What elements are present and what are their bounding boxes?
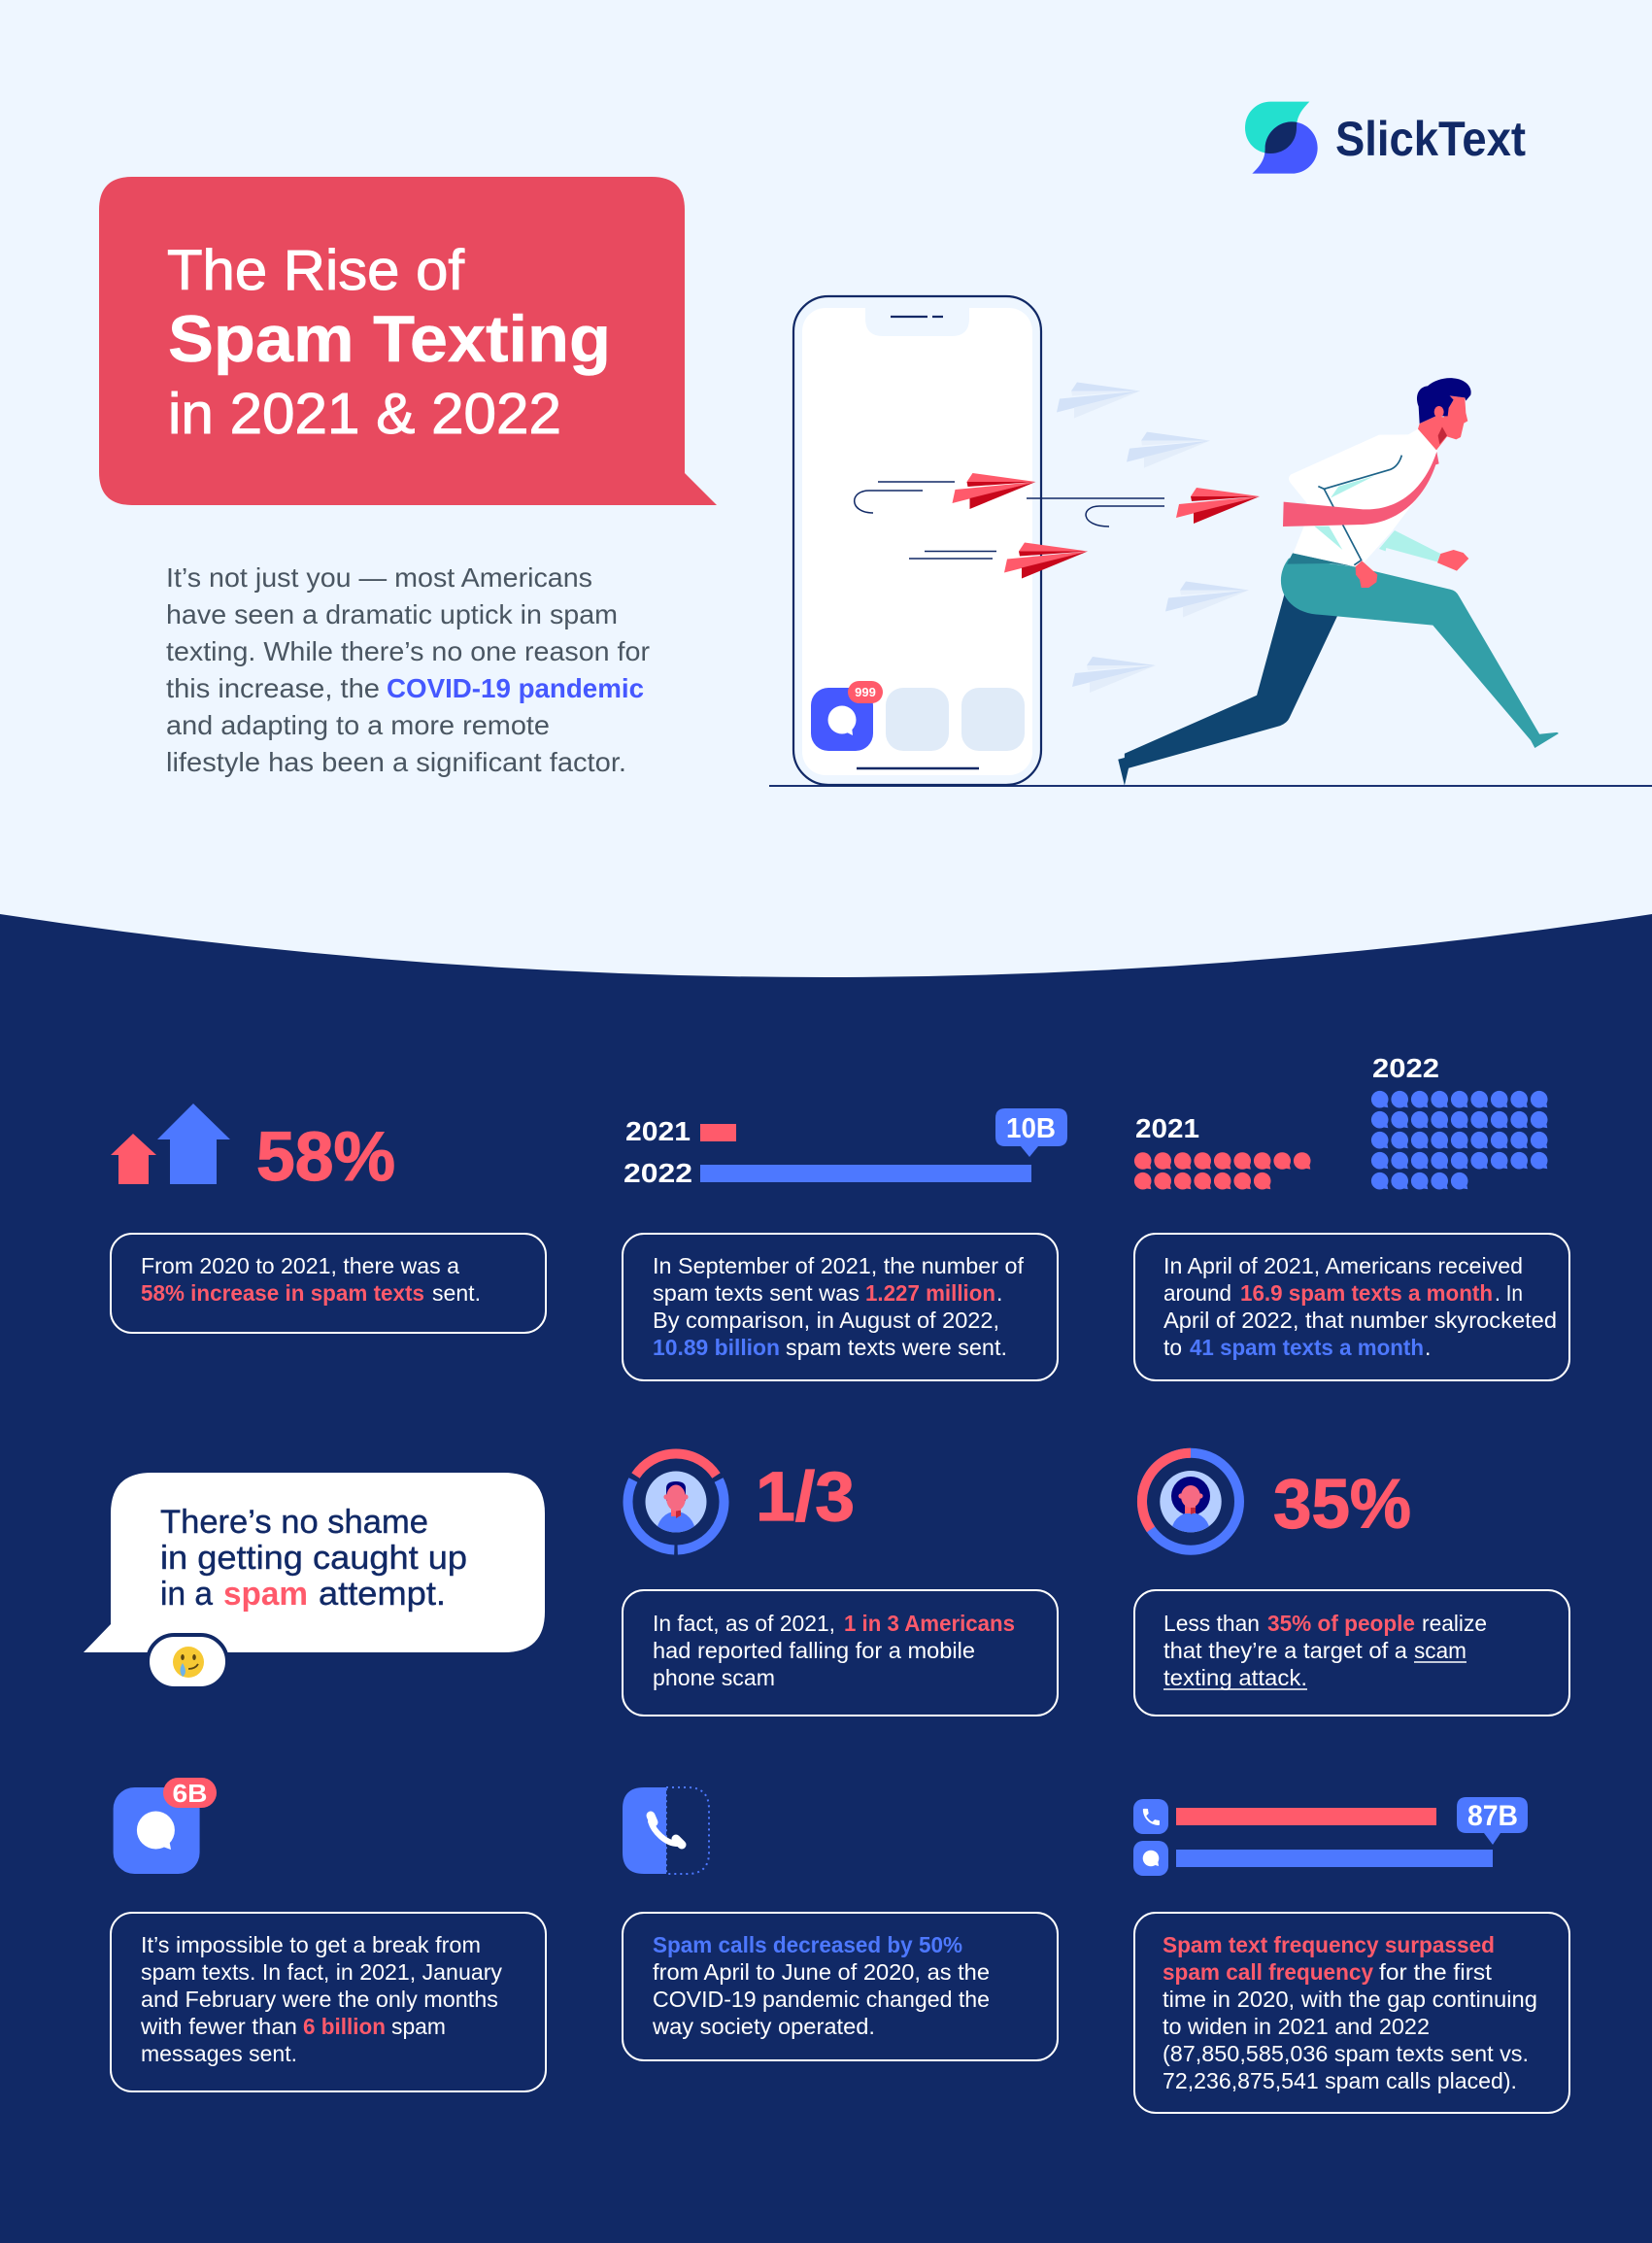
- app icon: messages: [811, 681, 883, 751]
- icon: message app with badge: 6B: [173, 1779, 208, 1808]
- intro paragraph: have seen a dramatic uptick in spam: [166, 599, 618, 629]
- bubble shape: [99, 177, 717, 505]
- bubble shape: [84, 1473, 545, 1652]
- callout box: (87,850,585,036 spam texts sent vs.: [1163, 2041, 1529, 2066]
- callout box: spam texts. In fact, in 2021, January: [141, 1959, 502, 1985]
- callout box: In fact, as of 2021,: [653, 1611, 835, 1636]
- callout box: way society operated.: [652, 2014, 875, 2039]
- intro paragraph: texting. While there’s no one reason for: [166, 636, 650, 666]
- stat 6: 6 billion: [111, 1778, 546, 2091]
- big number: 35%: [1273, 1467, 1411, 1544]
- callout box: sent.: [432, 1280, 481, 1306]
- man: legs: [1118, 559, 1559, 786]
- callout box: From 2020 to 2021, there was a: [141, 1253, 459, 1278]
- stat 3: spam texts per month pictogram: [1134, 1053, 1569, 1380]
- callout box: spam: [391, 2014, 446, 2039]
- callout box: for the first: [1379, 1959, 1493, 1985]
- callout box: 1 in 3 Americans: [844, 1611, 1015, 1636]
- callout box: 72,236,875,541 spam calls placed).: [1163, 2068, 1517, 2093]
- quote text: attempt.: [319, 1576, 446, 1613]
- callout box: texting attack.: [1163, 1665, 1307, 1690]
- big number: 1/3: [756, 1459, 855, 1536]
- illustration: running man: [1118, 378, 1559, 786]
- app icons: blank: [886, 688, 1025, 751]
- callout box: with fewer than: [140, 2014, 297, 2039]
- callout box: 58% increase in spam texts: [141, 1280, 424, 1306]
- callout box: [111, 1913, 546, 2091]
- callout box: Spam calls decreased by 50%: [653, 1932, 962, 1957]
- logo: SlickText: [1245, 102, 1526, 174]
- callout box: [1134, 1234, 1569, 1380]
- title text: in 2021 & 2022: [168, 382, 561, 446]
- stat 5: 35% of people: [1134, 1453, 1569, 1716]
- callout box: 1.227 million: [865, 1280, 995, 1306]
- intro paragraph: lifestyle has been a significant factor.: [166, 747, 626, 777]
- callout box: 6 billion: [303, 2014, 386, 2039]
- intro paragraph: and adapting to a more remote: [166, 710, 550, 740]
- icon: half phone app: [623, 1787, 709, 1874]
- bar chart: [624, 1108, 1067, 1188]
- stat 4: 1 in 3 Americans: [623, 1453, 1058, 1716]
- title bubble: [99, 177, 717, 505]
- bar chart: [1133, 1797, 1528, 1876]
- title text: The Rise of: [167, 239, 465, 302]
- icon: message app with badge: [114, 1778, 217, 1874]
- bar chart: 2021: [625, 1116, 691, 1146]
- intro paragraph: It’s not just you — most Americans: [166, 562, 592, 593]
- intro paragraph: COVID-19 pandemic: [387, 673, 644, 703]
- title text: [167, 239, 611, 446]
- badge: 87B: [1457, 1797, 1528, 1845]
- callout box: .: [996, 1280, 1002, 1306]
- callout box: COVID-19 pandemic changed the: [653, 1987, 990, 2012]
- pictogram 2021: [1134, 1113, 1310, 1189]
- illustration: phone: [793, 296, 1041, 785]
- icon: donut with avatar: [1142, 1453, 1239, 1553]
- callout box: In April of 2021, Americans received: [1163, 1253, 1523, 1278]
- callout box: time in 2020, with the gap continuing: [1163, 1987, 1537, 2012]
- badge: 87B: 87B: [1467, 1800, 1518, 1832]
- emoji pill: [148, 1635, 227, 1688]
- big number: 58%: [256, 1119, 395, 1196]
- callout box: [1134, 1590, 1569, 1716]
- callout box: .: [1425, 1335, 1431, 1360]
- pictogram 2022: [1371, 1053, 1547, 1189]
- illustration: ghost paper planes: [1057, 383, 1249, 693]
- callout box: that they’re a target of a: [1163, 1638, 1407, 1663]
- callout box: 16.9 spam texts a month: [1240, 1280, 1493, 1306]
- callout box: spam call frequency: [1163, 1959, 1373, 1985]
- callout box: By comparison, in August of 2022,: [653, 1308, 999, 1333]
- callout box: around: [1163, 1280, 1231, 1306]
- callout box: Less than: [1163, 1611, 1260, 1636]
- callout box: to widen in 2021 and 2022: [1163, 2014, 1430, 2039]
- callout box: It’s impossible to get a break from: [141, 1932, 481, 1957]
- callout box: 10.89 billion: [653, 1335, 780, 1360]
- app icon: messages: 999: [855, 685, 876, 699]
- badge: 10B: 10B: [1006, 1113, 1056, 1144]
- callout box: and February were the only months: [141, 1987, 498, 2012]
- quote text: spam: [223, 1576, 308, 1613]
- quote speech bubble: [84, 1473, 545, 1688]
- callout box: [111, 1234, 546, 1333]
- illustration: red paper planes with speed lines: [855, 473, 1260, 579]
- stat 7: spam calls decreased: [623, 1787, 1058, 2060]
- callout box: messages sent.: [141, 2041, 297, 2066]
- callout box: [1134, 1913, 1569, 2113]
- stat 2: bar comparison 2021 vs 2022: [623, 1108, 1067, 1380]
- logo wordmark: SlickText: [1335, 112, 1526, 166]
- quote text: [160, 1504, 467, 1613]
- callout box: Spam text frequency surpassed: [1163, 1932, 1495, 1957]
- bar chart: 2022: [624, 1158, 692, 1188]
- callout box: . In: [1495, 1280, 1523, 1306]
- intro paragraph: [166, 562, 650, 777]
- callout box: phone scam: [653, 1665, 775, 1690]
- quote text: in a: [160, 1576, 214, 1613]
- stat 1: 58% increase: [111, 1104, 546, 1333]
- callout box: from April to June of 2020, as the: [653, 1959, 990, 1985]
- callout box: [623, 1590, 1058, 1716]
- logo mark: [1245, 102, 1318, 174]
- callout box: April of 2022, that number skyrocketed: [1163, 1308, 1557, 1333]
- icon: ring with avatar: [627, 1453, 725, 1554]
- callout box: to: [1163, 1335, 1182, 1360]
- callout box: spam texts sent was: [653, 1280, 860, 1306]
- callout box: 41 spam texts a month: [1190, 1335, 1424, 1360]
- quote text: in getting caught up: [160, 1540, 467, 1577]
- callout box: In September of 2021, the number of: [653, 1253, 1025, 1278]
- callout box: [623, 1913, 1058, 2060]
- title text: Spam Texting: [168, 302, 611, 376]
- callout box: scam: [1414, 1638, 1467, 1663]
- man: torso, arms and head: [1283, 378, 1471, 588]
- pictogram 2022: 2022: [1372, 1053, 1439, 1083]
- pictogram 2021: 2021: [1135, 1113, 1199, 1143]
- callout box: 35% of people: [1267, 1611, 1415, 1636]
- callout box: spam texts were sent.: [786, 1335, 1007, 1360]
- background: navy curved section: [0, 914, 1652, 2243]
- callout box: [623, 1234, 1058, 1380]
- stat 8: spam text vs call frequency: [1133, 1797, 1569, 2113]
- callout box: realize: [1422, 1611, 1487, 1636]
- intro paragraph: this increase, the: [166, 673, 380, 703]
- icon: rising arrows: [111, 1104, 230, 1184]
- ground line: [769, 785, 1652, 787]
- badge: 10B: [995, 1108, 1067, 1157]
- quote text: There’s no shame: [160, 1504, 428, 1541]
- callout box: had reported falling for a mobile: [653, 1638, 975, 1663]
